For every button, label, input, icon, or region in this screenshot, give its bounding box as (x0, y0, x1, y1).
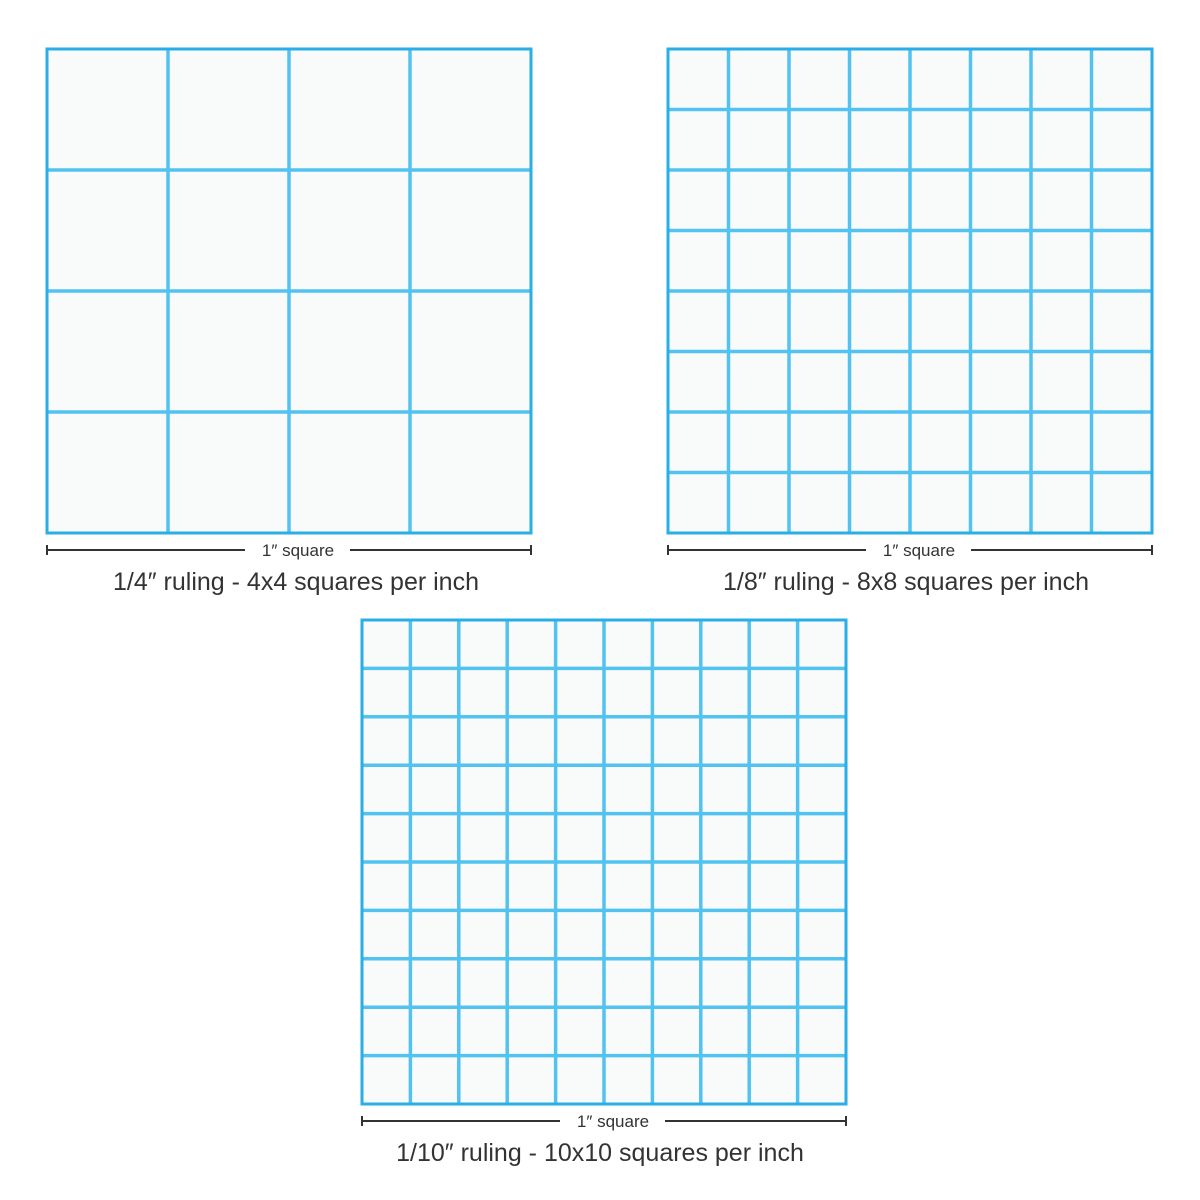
panel: 1/4 inch grid: 1″ square (262, 541, 334, 560)
panel: 1/4 inch grid (47, 49, 531, 596)
panel: 1/10 inch grid (362, 620, 846, 1167)
panel: 1/4 inch grid: 1/4″ ruling - 4x4 squares per inch (113, 568, 479, 596)
panel: 1/8 inch grid: 1″ square (883, 541, 955, 560)
panel: 1/8 inch grid: 1/8″ ruling - 8x8 squares per inch (723, 568, 1089, 596)
panel: 1/8 inch grid (668, 49, 1152, 596)
panel: 1/10 inch grid: 1″ square (577, 1112, 649, 1131)
panel: 1/10 inch grid: 1/10″ ruling - 10x10 squares per inch (396, 1139, 804, 1167)
